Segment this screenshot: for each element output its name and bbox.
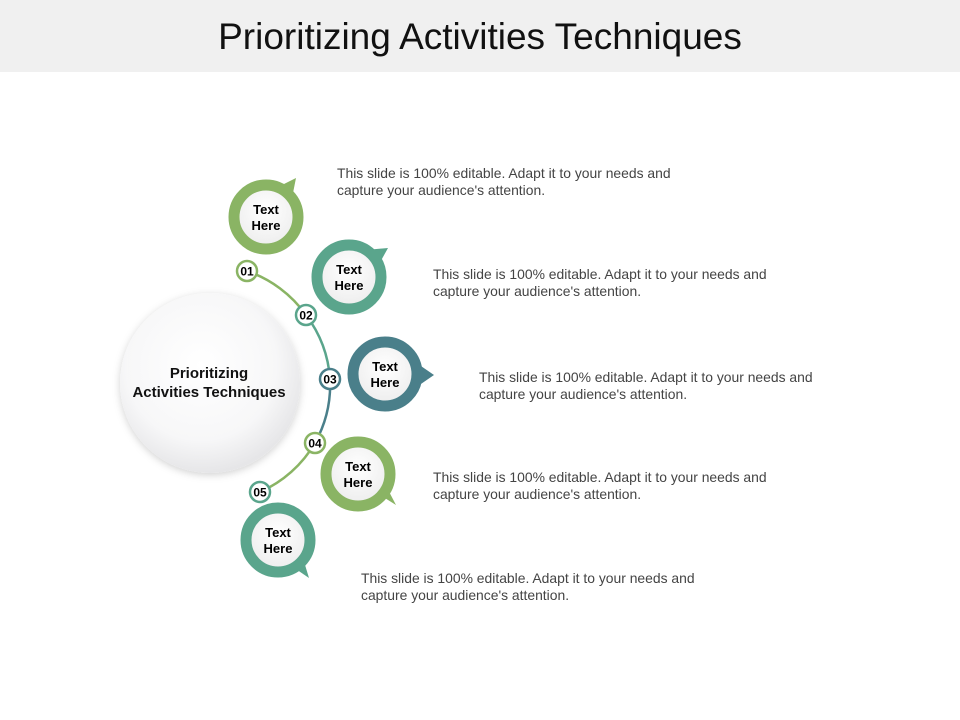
bubble 5: Text xyxy=(265,525,292,540)
central circle xyxy=(120,293,300,473)
title: Prioritizing Activities Techniques xyxy=(218,16,742,57)
text 1: This slide is 100% editable. Adapt it to your needs and capture your audience's attention. xyxy=(337,165,671,198)
bubble 2: Here xyxy=(335,278,363,293)
bubble 4: Text xyxy=(345,459,372,474)
number badges: 05 xyxy=(253,486,267,500)
bubble 5: Here xyxy=(264,541,292,556)
bubble 5 xyxy=(246,508,310,578)
text 5: This slide is 100% editable. Adapt it to your needs and capture your audience's attention. xyxy=(361,570,695,602)
number badges: 01 xyxy=(240,264,254,278)
number badges xyxy=(237,261,340,502)
central circle: Prioritizing xyxy=(170,365,248,382)
bubble 3: Here xyxy=(371,375,399,390)
number badges: 03 xyxy=(323,372,337,386)
text 4: This slide is 100% editable. Adapt it to your needs and capture your audience's attention. xyxy=(433,469,767,502)
text 3: This slide is 100% editable. Adapt it to your needs and capture your audience's attention. xyxy=(479,369,813,402)
bubble 1: Here xyxy=(252,218,280,233)
title xyxy=(0,0,960,72)
central circle: Activities Techniques xyxy=(132,384,286,401)
bubble 1: Text xyxy=(253,202,280,217)
bubble 2: Text xyxy=(336,262,363,277)
connector arc xyxy=(247,271,330,492)
bubble 3: Text xyxy=(372,359,399,374)
bubble 1 xyxy=(234,178,298,249)
bubble 4 xyxy=(326,442,396,506)
bubble 2 xyxy=(317,245,388,309)
bubble 3 xyxy=(353,342,434,406)
bubble 4: Here xyxy=(344,475,372,490)
number badges: 04 xyxy=(308,436,322,450)
text 2: This slide is 100% editable. Adapt it to your needs and capture your audience's attention. xyxy=(433,266,767,298)
number badges: 02 xyxy=(299,308,313,322)
